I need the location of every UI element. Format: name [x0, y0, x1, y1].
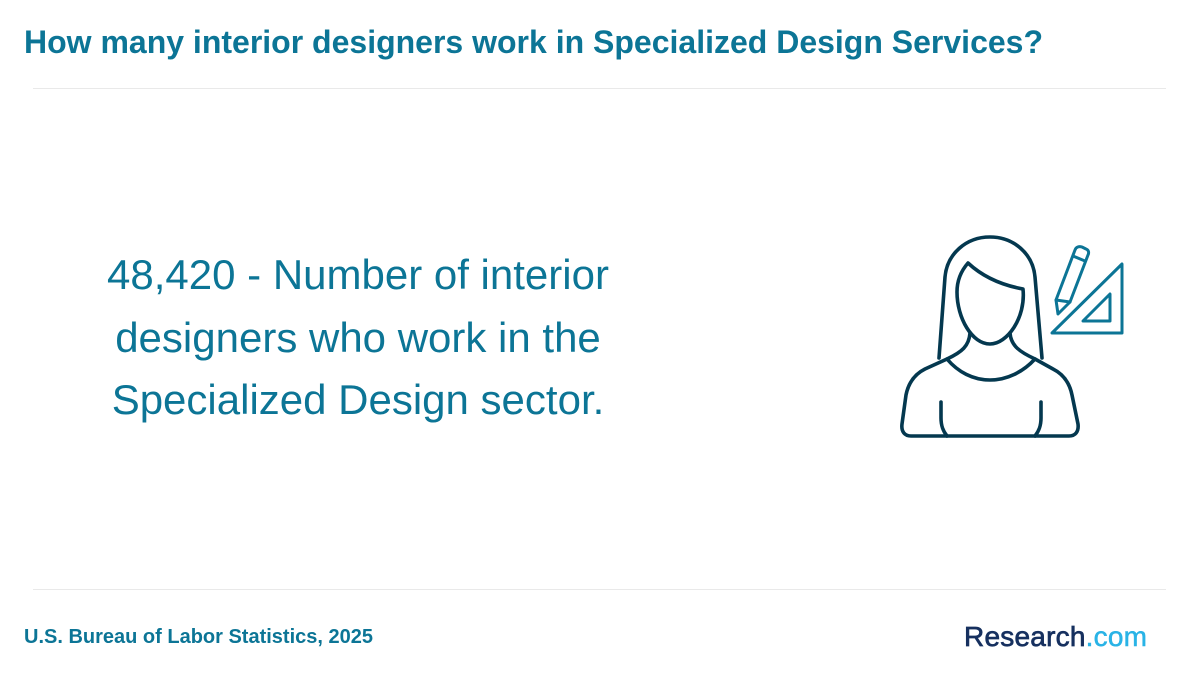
logo: Research.com: Research.com: [964, 621, 1147, 652]
main statistic text: 48,420 - Number of interior: [107, 251, 609, 298]
main statistic text: [107, 251, 609, 423]
title: How many interior designers work in Specialized Design Services?: [24, 24, 1043, 60]
main statistic text: designers who work in the: [115, 314, 601, 360]
icon: woman designer with pencil and set square: [900, 235, 1124, 438]
source note: U.S. Bureau of Labor Statistics, 2025: [24, 626, 373, 648]
icon: pencil and set square: [1052, 247, 1122, 333]
icon: woman figure: [902, 237, 1078, 436]
main statistic text: Specialized Design sector.: [112, 376, 604, 423]
